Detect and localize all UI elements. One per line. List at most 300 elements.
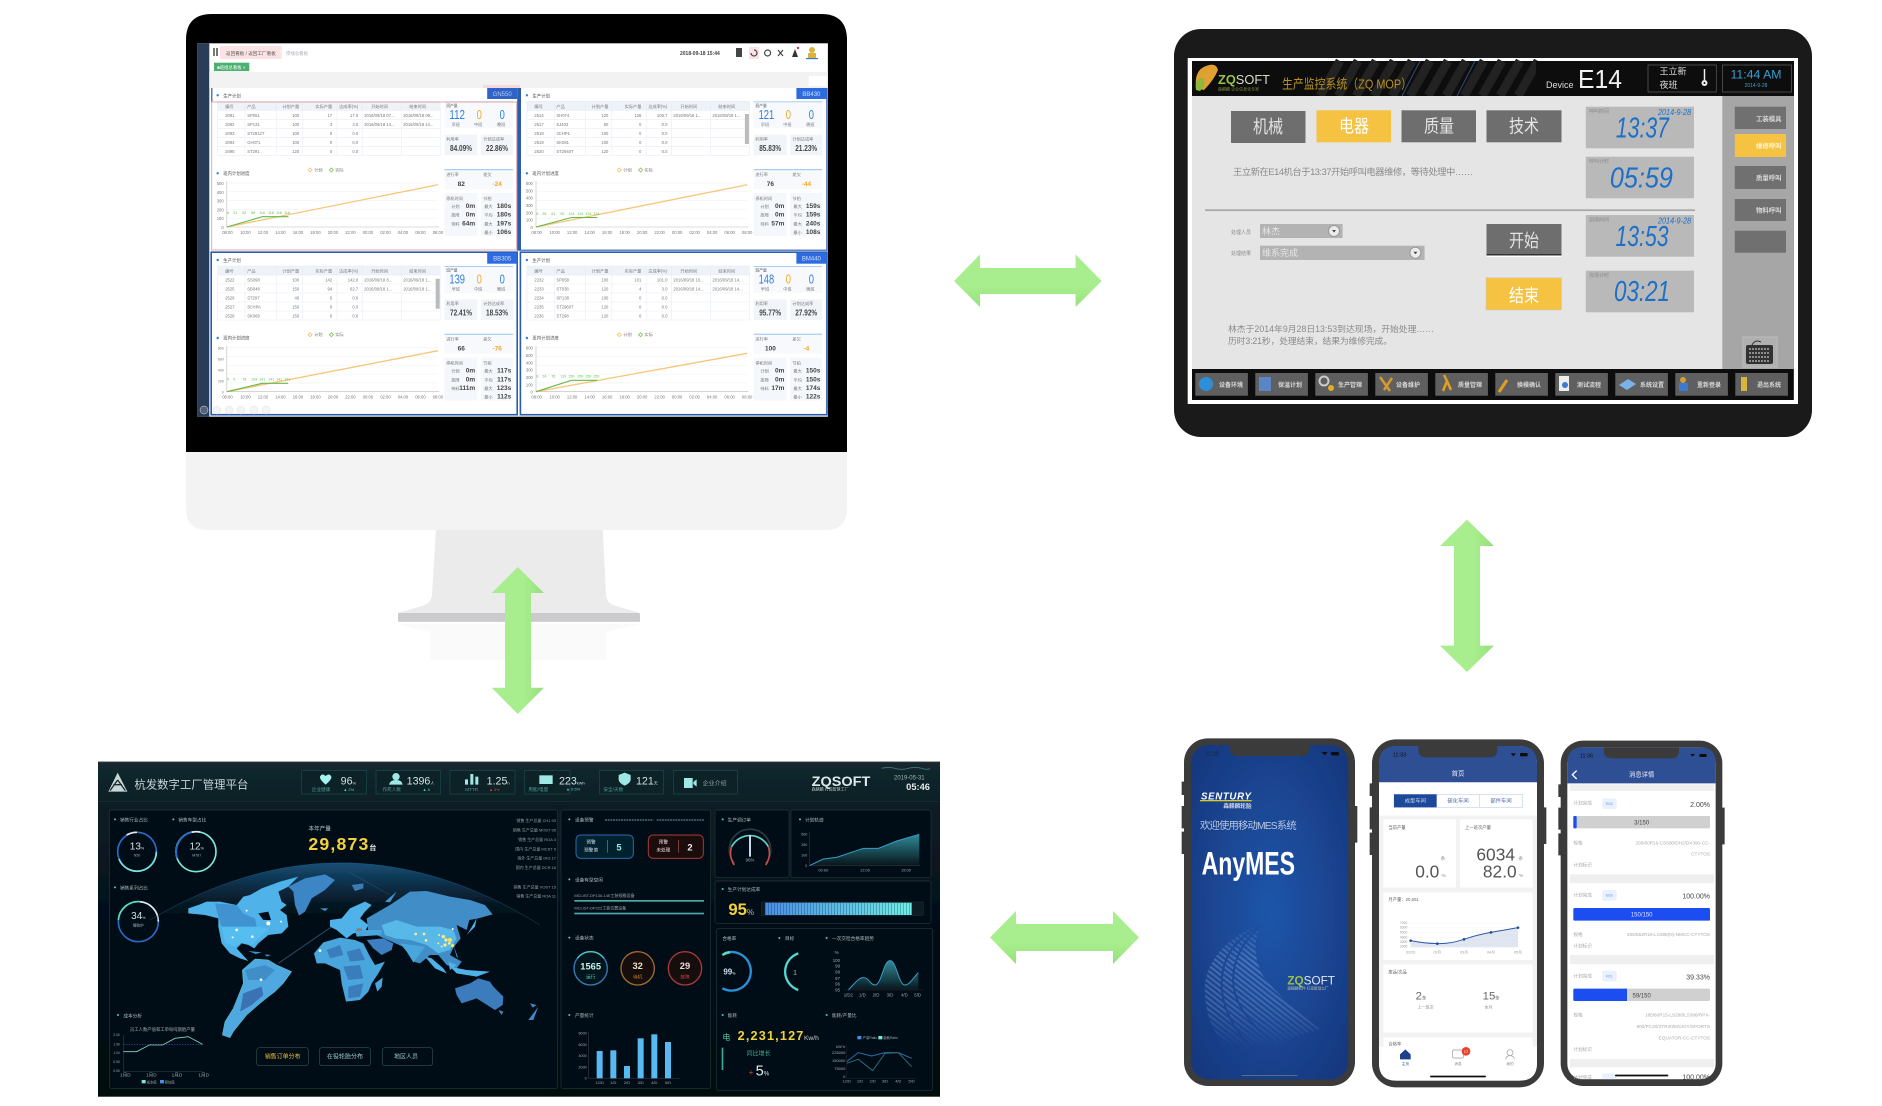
energy per output chart: [826, 1012, 917, 1084]
panel: GN550: 0: [330, 131, 333, 136]
panel: BB305: SK068: [247, 314, 260, 318]
output bar chart: 产量统计: [575, 1012, 594, 1019]
panel: GN550: 08:00: [222, 230, 233, 235]
panel: BB430: 2520: [534, 149, 544, 154]
panel: BB430: 晚班: [806, 121, 815, 128]
panel: BB305: 200: [218, 380, 224, 384]
panel: BM440: 待料: [760, 385, 770, 392]
panel: GN550: 21: [233, 211, 237, 215]
plan card 3: 计划标识: [1573, 1046, 1592, 1053]
monitor screen: [197, 43, 828, 417]
monthly output chart: 5000: [1400, 930, 1407, 934]
panel: BB430: 120: [601, 113, 609, 118]
panel: BM440: 2016/09/18 14...: [712, 277, 743, 282]
plan card 1: 计划完成: [1573, 800, 1592, 807]
panel: GN550: 最大: [484, 203, 493, 210]
panel: BB305: 开始时间: [371, 267, 388, 274]
panel: BM440: 150s: [806, 376, 821, 383]
panel: BM440: 150s: [806, 368, 821, 375]
panel: BM440: 0: [639, 304, 642, 309]
monitor: desktop MES dashboard: [186, 14, 847, 660]
panel: BB430: 3CHP1: [556, 131, 571, 136]
panel: GN550: 中班: [474, 121, 482, 128]
panel: BB305: 9: [227, 378, 229, 382]
plan card 2: 205/55ZR16-LS388(N)-NMCC-CTYTOS: [1627, 932, 1710, 937]
panel: GN550: 0.0: [352, 149, 359, 154]
panel: GN550: 计划: [314, 166, 323, 174]
panel: BM440: 101.0: [657, 277, 668, 282]
panel: GN550: [211, 88, 520, 251]
panel: BB305: 编号: [225, 267, 234, 274]
panel: BB430: 2519: [534, 140, 544, 145]
panel: BB305: 最小: [484, 394, 493, 401]
category tabs: 机械: [1253, 117, 1283, 137]
panel: GN550: 89: [251, 211, 255, 215]
panel: plan achievement: 生产计划达成率: [728, 886, 761, 893]
panel: BB305: 晚班: [497, 286, 505, 293]
panel: GN550: 最小: [484, 229, 493, 236]
panel: BM440: SP058: [556, 277, 570, 282]
tablet header: 夜班: [1660, 79, 1678, 90]
bottom navigation bar: 重新登录: [1697, 381, 1721, 389]
regional output list: 海外 生产总量 DIG 17: [517, 855, 557, 861]
panel: BB305: 16:00: [293, 395, 304, 400]
panel: GN550: 100: [292, 122, 300, 127]
panel: GN550: 计划: [451, 203, 460, 210]
right call sidebar: 工装模具: [1756, 114, 1782, 123]
last shift output card: [1460, 819, 1533, 888]
KPI: safety days: 安全/天数: [603, 786, 624, 793]
panel: BB430: 停机时间: [755, 195, 772, 202]
panel: BB430: 124: [585, 212, 591, 216]
panel: BM440: 实际: [644, 331, 653, 338]
category tabs: [1231, 110, 1562, 143]
panel: BM440: 生产计划: [532, 257, 550, 264]
KPI: health: 96%: [341, 775, 357, 787]
last shift output card: 82.0: [1483, 862, 1517, 882]
panel: plan achievement: 95%: [728, 900, 754, 919]
panel: BB305: 利用率: [446, 300, 459, 307]
panel: BB305: 计划: [314, 331, 323, 338]
panel: GN550: 16:00: [293, 230, 304, 235]
map filter buttons: [257, 1048, 433, 1066]
dashboard left part: [98, 771, 570, 1088]
phone tab bar: 17: [1464, 1049, 1469, 1054]
panel: BB305: 0: [330, 314, 333, 318]
panel: BM440: 06:00: [724, 395, 736, 400]
panel: BB430: [520, 88, 827, 251]
monthly output chart: 03月: [1460, 950, 1468, 955]
panel: BB430: 2016/09/18 1...: [712, 113, 740, 118]
panel: GN550: 待料: [451, 220, 460, 227]
dashboard right part: [550, 767, 939, 1091]
panel: BM440: 150: [568, 375, 574, 379]
panel: GN550: 08:00: [433, 230, 444, 235]
sales share rings: M787: [192, 854, 201, 858]
monthly output chart: 6000: [1400, 926, 1407, 930]
plan card 1: 2.00%: [1690, 802, 1710, 809]
panel: BB305: 22:00: [345, 395, 356, 400]
panel: GN550: 300: [217, 199, 224, 204]
panel: BM440: 计划产量: [592, 267, 608, 274]
panel: BM440: 0: [639, 314, 642, 318]
panel: BB305: 12:00: [258, 395, 269, 400]
plan card 3: 185/60R15-LS288/LS388/RPX-: [1645, 1013, 1710, 1018]
annual output: 本年产量: [308, 825, 331, 833]
panel: BB305: 停机时间: [446, 360, 463, 367]
panel: BM440: 0.0: [662, 295, 668, 300]
ZQSOFT logo and clock: 森麒麟 打造智慧工厂: [812, 786, 849, 792]
handler form: 处理人员: [1231, 229, 1251, 236]
energy per output chart: kW·h: [836, 1044, 845, 1049]
panel: GN550: 400: [217, 190, 224, 195]
panel: BB305: 差欠: [483, 336, 492, 343]
equipment alerts: 预警值: [584, 847, 598, 854]
monthly output chart: 02月: [1433, 950, 1441, 955]
panel: GN550: 实际: [335, 166, 344, 174]
panel: BB430: 编号: [534, 103, 543, 110]
panel: BB305: 中班: [474, 286, 482, 293]
panel: plan tracking area chart: 12:00: [860, 867, 871, 872]
regional output list: 销售 生产总量 CH1 93: [516, 817, 557, 823]
idle equipment: 设备有型空闲: [575, 876, 603, 883]
time display boxes: 05:59: [1610, 162, 1673, 194]
time display boxes: 13:53: [1616, 221, 1668, 253]
bottom navigation bar: 系统设置: [1640, 381, 1664, 389]
first-pass trend chart: 100: [833, 958, 841, 963]
panel: GN550: 2016/09/18 07...: [364, 113, 394, 118]
panel: GN550: 100: [217, 216, 224, 221]
panel: GN550: 500: [217, 181, 224, 186]
panel: BB305: 计划: [451, 368, 460, 375]
panel: GN550: 2016/09/18 14...: [403, 122, 433, 127]
panel: BB430: 02:00: [689, 230, 701, 235]
panel: GN550: GN550: [493, 92, 512, 98]
panel: BB430: -44: [802, 181, 811, 188]
panel: plan tracking area chart: 250: [801, 843, 807, 847]
idle equipment: MCLIST-DP130-14E工装规格设备: [574, 892, 635, 898]
panel: BM440: 早班: [761, 286, 769, 293]
panel: BB305: [211, 252, 517, 415]
panel: GN550: 班产量: [446, 103, 458, 108]
panel: BB430: 待料: [760, 220, 770, 227]
energy per output chart: 能耗/产量比: [832, 1012, 857, 1019]
panel: BB305: 3CHPA: [247, 304, 261, 309]
scrap card: 废品/次品: [1388, 969, 1407, 976]
panel: GN550: 00:00: [363, 230, 374, 235]
output bar chart: 8000: [579, 1032, 587, 1036]
panel: BB430: 实际: [644, 166, 653, 174]
panel: GN550: 达成率(%): [339, 103, 359, 110]
plan card 3: 39.33%: [1686, 974, 1710, 981]
sales share rings: 暖胎炉: [133, 923, 144, 928]
panel: BB430: 18:00: [619, 230, 631, 235]
panel: BB305: 08:00: [222, 395, 233, 400]
ZQSOFT mark: ZQSOFT: [1287, 973, 1336, 987]
output bar chart: 1/D: [610, 1080, 617, 1085]
monitor chin: [186, 452, 847, 530]
panel: BM440: 中班: [783, 286, 792, 293]
panel: GN550: 8: [227, 211, 229, 215]
panel: BM440: 500: [526, 353, 534, 358]
panel: BM440: 0: [531, 390, 534, 395]
cost analysis chart: 1月D: [172, 1073, 183, 1079]
panel: BB305: 109: [251, 378, 257, 382]
KPI: company intro: [673, 771, 737, 794]
panel: BB430: 班内计划进度: [532, 170, 559, 177]
panel: BM440: ST298: [556, 314, 569, 318]
panel: BM440: 最大: [793, 368, 802, 375]
panel: BB305: 0m: [466, 376, 475, 383]
panel: BM440: 2016/09/18 14...: [673, 286, 704, 291]
bottom-left tool icons: [200, 406, 270, 414]
screen header: 2018-09-18 15:44: [680, 51, 720, 57]
panel: BM440: 120: [601, 286, 609, 291]
arrow: dashboard to phones: [990, 911, 1139, 964]
panel: BB430: SJ403: [556, 122, 569, 127]
first-pass trend chart: 97: [835, 976, 841, 981]
panel: BB305: 平均: [484, 376, 493, 383]
ZQSOFT mark: 森麒麟软件 打造智慧工厂: [1287, 985, 1329, 990]
panel: BB305: 141: [284, 378, 290, 382]
plan card 1: [1573, 798, 1710, 869]
handler form: 林杰: [1262, 226, 1280, 236]
panel: BB430: 20:00: [637, 230, 648, 235]
ZQSOFT logo and clock: [812, 767, 930, 792]
panel: GN550: 112: [449, 108, 465, 122]
pass rate rings: 目标: [785, 935, 795, 942]
panel: BB430: 85.83%: [759, 144, 781, 153]
cost analysis chart: 员工人数产值和工单每吨钢胎产量: [130, 1026, 196, 1033]
start button: [1486, 224, 1562, 257]
panel: BM440: 27.92%: [795, 309, 817, 318]
equipment alerts: 设备预警: [575, 816, 594, 823]
plan card 3: 800/PC20/ZTR20/ENJOY/SPORTS: [1637, 1024, 1710, 1029]
KPI: staff: 作死人数: [382, 786, 401, 793]
tablet header: 森麒麟 企业信息化专家: [1218, 86, 1259, 92]
arrow: tablet to phones: [1440, 520, 1494, 672]
mobile phones: AnyMES: [1182, 738, 1725, 1087]
energy use: 能耗: [728, 1012, 737, 1019]
panel: BB305: 20:00: [328, 395, 339, 400]
panel: GN550: 18:00: [310, 230, 321, 235]
panel: BM440: 计划: [760, 368, 769, 375]
tablet header: 2014-9-28: [1745, 83, 1768, 89]
panel: BM440: 0.0: [662, 304, 668, 309]
idle equipment: [568, 876, 704, 914]
arrow: monitor to dashboard: [492, 567, 544, 714]
panel: BB305: 2527: [225, 304, 235, 309]
panel: BB430: 124: [577, 212, 583, 216]
panel: GN550: ST2912T: [247, 131, 265, 136]
monthly output chart: 2000: [1400, 945, 1407, 949]
tablet header: 王立新: [1660, 66, 1687, 76]
panel: BM440: 节拍: [792, 360, 801, 367]
tablet header: Device: [1546, 80, 1574, 90]
panel: GN550: 利用率: [446, 136, 459, 142]
pass rate rings: 合格率: [722, 935, 737, 942]
panel: equipment: [561, 810, 711, 1088]
panel: BB430: 0m: [775, 203, 785, 210]
first-pass trend chart: 99: [835, 963, 841, 968]
time display boxes: 13:37: [1616, 112, 1670, 144]
energy use: 电: [722, 1032, 730, 1042]
panel: BM440: 08:00: [531, 395, 543, 400]
panel: GN550: 生产计划: [223, 92, 241, 99]
panel: plan tracking area chart: 09:00: [818, 867, 829, 872]
panel: BM440: 3.0: [662, 286, 668, 291]
panel: BB305: 0: [500, 273, 505, 287]
current output card: 当前产量: [1388, 824, 1406, 831]
panel: BB305: 0.0: [352, 304, 359, 309]
panel: BB430: 240s: [806, 220, 821, 227]
welcome text: 欢迎使用移动MES系统: [1200, 819, 1297, 832]
call status message: 王立新在E14机台于13:37开始呼叫电器维修，等待处理中……: [1233, 166, 1473, 177]
panel: BB305: 0m: [466, 368, 475, 375]
panel: order gauge: 生产调订单: [728, 816, 751, 823]
panel: GN550: 3.0: [352, 122, 359, 127]
cost analysis chart: 成本分析: [123, 1012, 142, 1019]
panel: BM440: 20:00: [637, 395, 648, 400]
panel: BB305: 故障: [451, 376, 460, 383]
first-pass trend chart: 95: [835, 987, 841, 992]
plan card 2: 规格: [1573, 931, 1583, 938]
panel: BB430: 128: [634, 113, 642, 118]
bottom navigation bar: [1192, 369, 1794, 400]
panel: BB305: 117s: [497, 376, 512, 383]
equipment alerts: 未处理: [656, 847, 671, 854]
panel: BB430: 0: [639, 131, 642, 136]
panel: plan achievement: [715, 881, 931, 923]
time display boxes: 03:21: [1614, 276, 1670, 308]
panel: BB305: 111m: [459, 385, 475, 392]
plan card 3: [1573, 971, 1710, 1053]
panel: plan tracking area chart: 15:00: [901, 867, 912, 872]
plan card 3: 59/150: [1633, 993, 1651, 999]
panel: BB305: ST297: [247, 295, 260, 300]
panel: GN550: 04:00: [398, 230, 409, 235]
panel: BM440: 0m: [775, 368, 785, 375]
time display boxes: 到场时间: [1589, 216, 1609, 224]
panel: BB430: 利用率: [755, 136, 768, 142]
panel: GN550: 0.0: [352, 140, 359, 145]
energy use: 2,231,127: [738, 1029, 803, 1043]
panel: GN550: 0m: [466, 212, 475, 219]
panel: BB430: 04:00: [707, 230, 718, 235]
panel: GN550: 0: [330, 149, 333, 154]
time display boxes: 2014-9-28: [1657, 216, 1691, 226]
cost analysis chart: 2.00: [113, 1033, 120, 1037]
plan card 1: 205/60R16-CS600/DH2/DX390-CC-: [1635, 840, 1710, 845]
equipment alerts: [568, 816, 704, 858]
plan card 1: 规格: [1573, 839, 1583, 846]
end button: 结束: [1509, 286, 1539, 306]
panel: BB430: 100: [601, 131, 609, 136]
panel: GN550: 120: [292, 149, 300, 154]
panel: BB430: 61: [551, 212, 555, 216]
annual output: 台: [369, 843, 376, 852]
panel: GN550: 0: [500, 108, 505, 122]
panel: BM440: BM440: [802, 256, 822, 262]
panel: GN550: 2016/09/18 09...: [403, 113, 433, 118]
regional output list: 国内 生产总量 DCR 18: [516, 864, 557, 870]
panel: BB430: 0.0: [662, 122, 668, 127]
panel: BM440: 平均: [793, 376, 802, 383]
panel: GN550: 02:00: [380, 230, 391, 235]
panel: BM440: 达成率(%): [648, 267, 668, 274]
world map: Europe, Africa, Asia, Oceania: [314, 872, 538, 1020]
panel: BM440: 晚班: [806, 286, 815, 293]
panel: BM440: 0: [809, 273, 814, 287]
plan card 3: 规格: [1573, 1012, 1583, 1019]
tablet header: E14: [1578, 64, 1622, 94]
panel: BM440: 100: [526, 382, 534, 387]
first-pass trend chart: 98: [835, 969, 841, 974]
current output card: [1383, 819, 1456, 888]
panel: GN550: 100: [292, 131, 300, 136]
plan card 4 cut off: 计划完成: [1573, 1074, 1592, 1081]
panel: BB430: 0.0: [662, 131, 668, 136]
equipment status rings: [568, 935, 702, 985]
panel: BB305: 最大: [484, 385, 493, 392]
first-pass trend chart: 一次交检合格率趋势: [832, 935, 874, 942]
handler form: 维系完成: [1262, 247, 1298, 258]
panel: BB305: 2522: [225, 277, 235, 282]
KPI: MTTR: [450, 771, 515, 794]
panel: BB305: 139: [449, 273, 465, 287]
energy use: +: [749, 1068, 754, 1077]
panel: BB305: 0: [330, 304, 333, 309]
panel: BB305: 66: [458, 346, 465, 353]
panel: BM440: 16:00: [602, 395, 613, 400]
plan card 4 cut off: [1567, 1073, 1716, 1081]
panel: BM440: 0: [786, 273, 791, 287]
plan card 2: 150/150: [1631, 913, 1653, 919]
ZQSOFT logo and clock: ZQSOFT: [812, 773, 871, 789]
equipment alerts: 预警: [586, 839, 596, 846]
panel: BB430: 0m: [775, 212, 785, 219]
globe dome: [150, 863, 540, 925]
panel: BM440: 0m: [775, 376, 785, 383]
output bar chart: 12/D: [595, 1080, 604, 1085]
panel: GN550: 14:00: [275, 230, 286, 235]
panel: BB305: 2016/09/18 1...: [403, 277, 431, 282]
plan card 2: 100.00%: [1682, 894, 1710, 901]
panel: BB430: 106.7: [657, 113, 668, 118]
panel: BB430: 结束时间: [718, 103, 735, 110]
equipment status rings: 故障: [680, 973, 690, 980]
panel: GN550: 0: [477, 108, 482, 122]
sales share rings: 12%: [189, 841, 205, 852]
panel: GN550: 0m: [466, 203, 475, 210]
panel: BB430: 生产计划: [532, 92, 550, 99]
panel: BB430: 0: [639, 149, 642, 154]
panel: GN550: 进行率: [446, 171, 459, 178]
panel: GN550: 180s: [497, 203, 512, 210]
KPI: MTTR: MTTR: [465, 787, 479, 792]
plan card 2: E03: [1606, 894, 1613, 898]
screen header: ■班组总看板 ×: [217, 64, 246, 71]
regional output list: [513, 817, 557, 899]
panel: GN550: 节拍: [483, 195, 492, 202]
panel: plan tracking area chart: 0: [805, 864, 807, 868]
tablet header: ZQSOFT: [1218, 72, 1270, 87]
phone: splash screen: [1182, 738, 1357, 1086]
tablet header: [1192, 61, 1794, 96]
panel: GN550: 116: [276, 211, 282, 215]
plan card 4 cut off: 100.00%: [1682, 1074, 1710, 1081]
panel: BB430: 0: [809, 108, 814, 122]
